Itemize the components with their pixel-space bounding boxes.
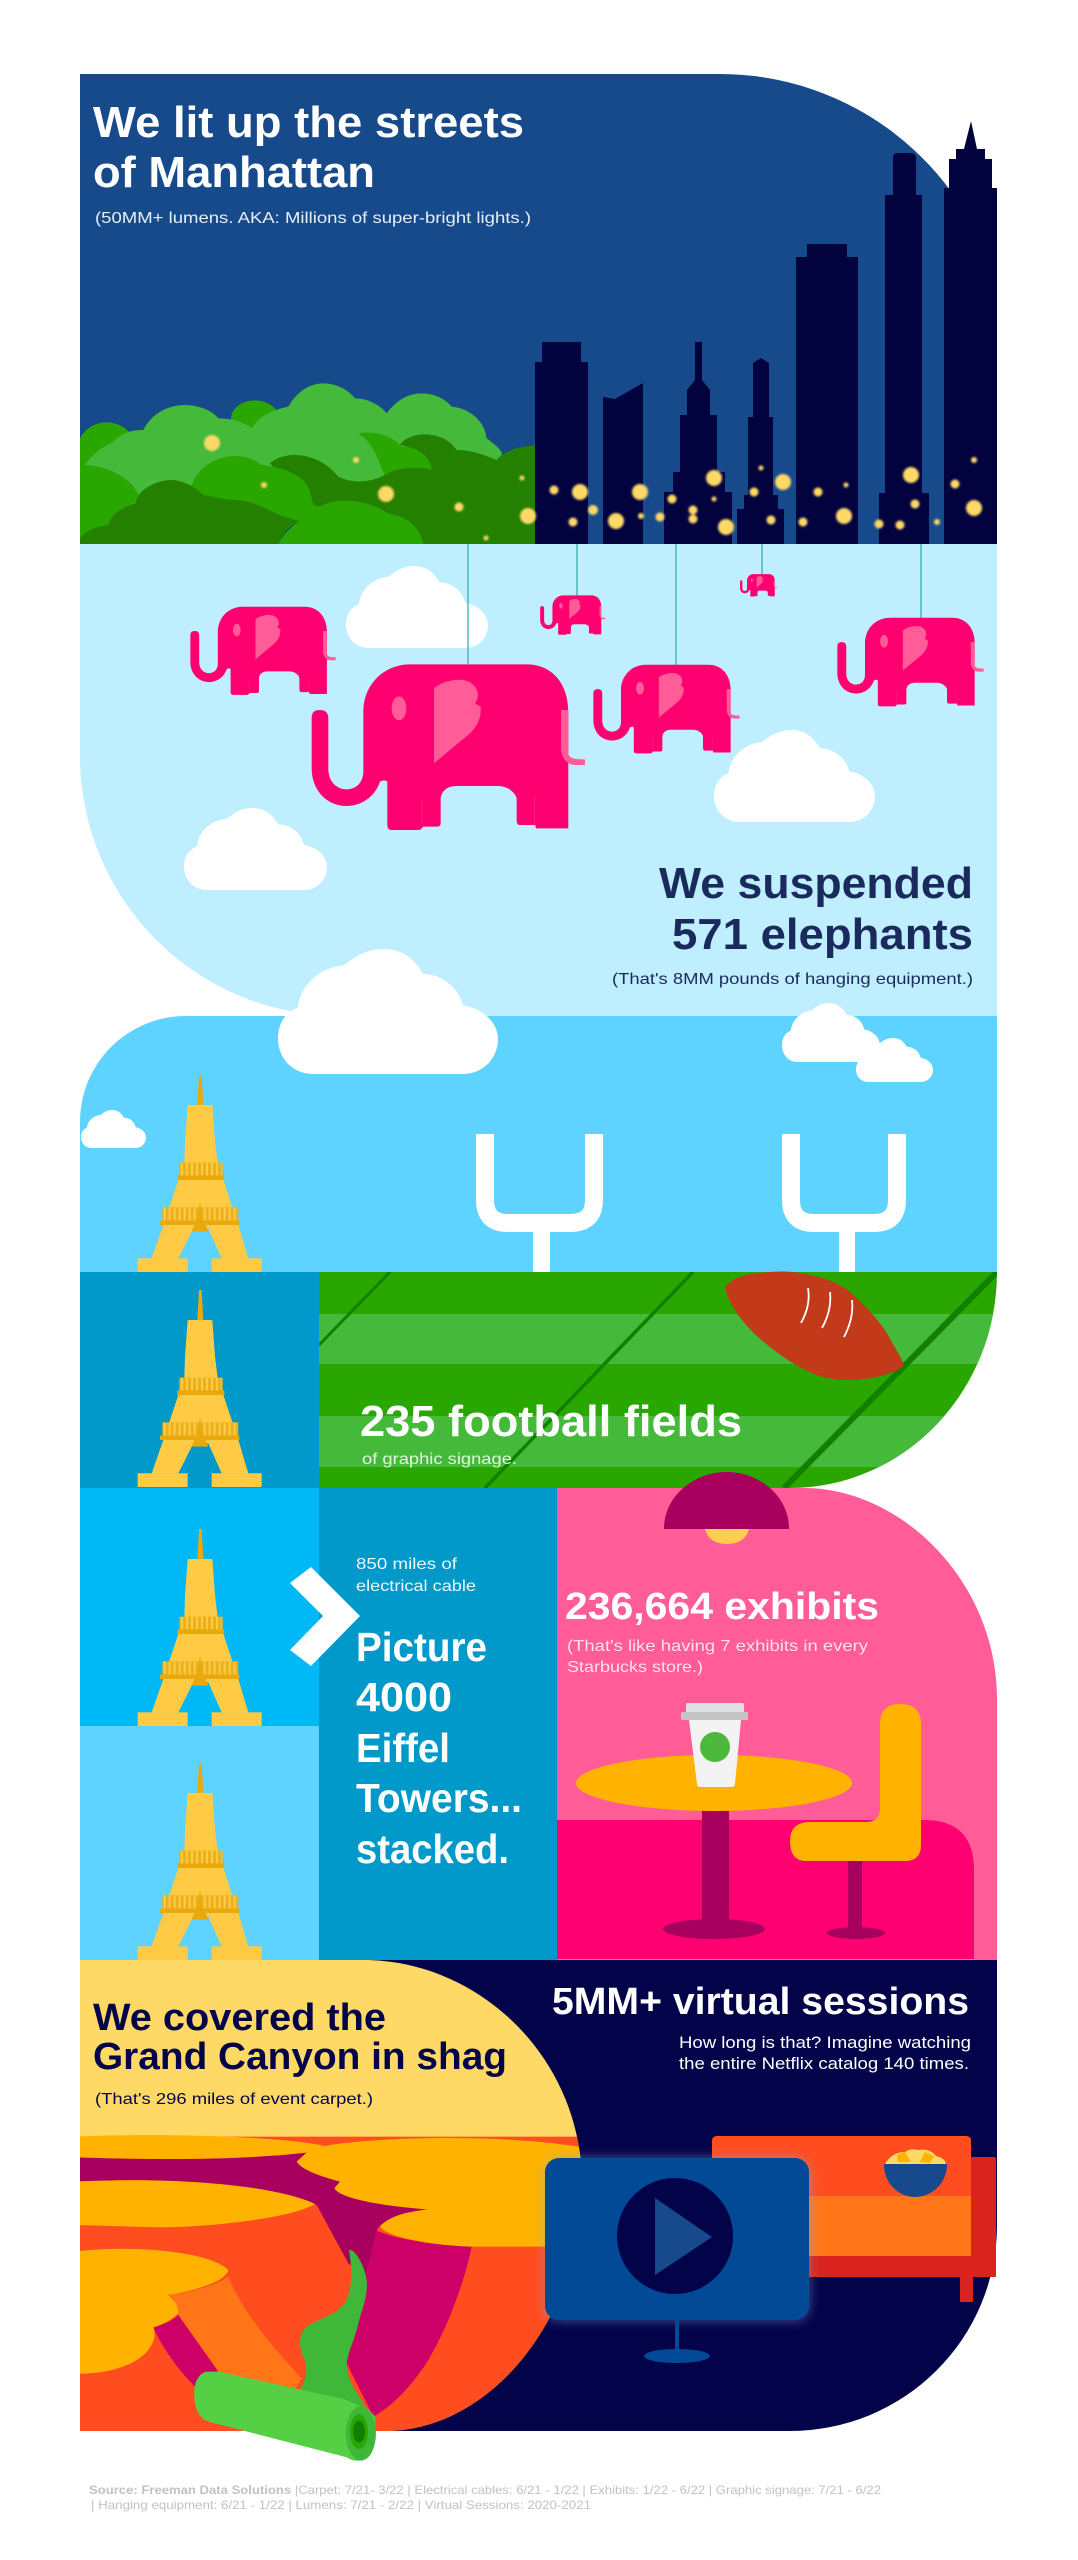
sky background bbox=[80, 1016, 997, 1272]
panel: Grand Canyon bbox=[75, 1960, 595, 2461]
cloud bbox=[714, 730, 875, 822]
panel: cable column bbox=[319, 1488, 557, 1960]
text: electrical cable: 850 miles of bbox=[356, 1556, 458, 1573]
heading: 236,664 exhibits: 236,664 exhibits bbox=[565, 1586, 879, 1628]
cloud bbox=[346, 566, 488, 648]
elephant: large centre bbox=[312, 664, 585, 830]
sofa bbox=[712, 2136, 996, 2302]
subtitle: Netflix comparison: How long is that? Imagine watching bbox=[679, 2033, 971, 2052]
lights bbox=[204, 435, 982, 540]
elephant: small bbox=[540, 595, 605, 635]
pink background bbox=[557, 1488, 997, 1960]
football bbox=[725, 1272, 904, 1380]
heading: We suspended 571 elephants: We suspended bbox=[659, 859, 973, 908]
subtitle: Starbucks comparison: Starbucks store.) bbox=[567, 1659, 703, 1676]
coffee cup bbox=[681, 1703, 748, 1787]
canyon illustration bbox=[75, 1960, 595, 2437]
cloud: small right bbox=[856, 1038, 933, 1082]
heading: Picture 4000 Eiffel Towers stacked: stacked. bbox=[356, 1826, 509, 1872]
panel: tower tile sky blue bbox=[80, 1726, 319, 1960]
heading: We covered the Grand Canyon in shag: Grand Canyon in shag bbox=[93, 2036, 507, 2078]
cloud bbox=[81, 1110, 146, 1148]
icon: Eiffel Tower 1 bbox=[138, 1075, 262, 1272]
dark background bbox=[80, 1960, 997, 2431]
goalpost: left bbox=[485, 1134, 594, 1272]
title: We lit up the streets of Manhattan: We lit up the streets bbox=[93, 98, 524, 147]
cloud bbox=[184, 808, 327, 890]
subtitle: graphic signage: of graphic signage. bbox=[362, 1451, 517, 1468]
heading: Picture 4000 Eiffel Towers stacked: 4000 bbox=[356, 1674, 452, 1720]
footer: source note: Source: Freeman Data Solutions |Carpet: 7/21- 3/22 | Electrical cables: 6/21 - 1/22 | Exhibits: 1/22 - 6/22 | Graphic signage: 7/21 - 6/22 bbox=[89, 2483, 832, 2497]
elephant: medium centre bbox=[593, 665, 740, 753]
subtitle: Starbucks comparison: (That's like having 7 exhibits in every bbox=[567, 1638, 868, 1655]
skyline bbox=[535, 121, 997, 544]
title: We lit up the streets of Manhattan: of Manhattan bbox=[93, 148, 375, 197]
panel: exhibits bbox=[557, 1472, 997, 1960]
cloud: right overlapping panels bbox=[782, 1003, 880, 1062]
heading: 235 football fields: 235 football fields bbox=[360, 1397, 742, 1446]
panel background: pale sky bbox=[80, 544, 997, 1016]
panel: tower tile bright blue bbox=[80, 1488, 319, 1726]
arrow: chevron bbox=[290, 1567, 360, 1666]
icon: Eiffel Tower 4 bbox=[138, 1763, 262, 1960]
subtitle: hanging equipment: (That's 8MM pounds of hanging equipment.) bbox=[612, 971, 973, 988]
trees bbox=[77, 383, 538, 548]
panel: Manhattan lights bbox=[77, 74, 997, 548]
video screen bbox=[545, 2158, 809, 2363]
panel background: night sky bbox=[80, 74, 997, 544]
panel: virtual sessions bbox=[80, 1960, 997, 2431]
heading: Picture 4000 Eiffel Towers stacked: Picture bbox=[356, 1624, 487, 1670]
panel: football field bbox=[319, 1272, 999, 1488]
icon: Eiffel Tower 3 bbox=[138, 1529, 262, 1726]
front shrub bbox=[278, 500, 424, 544]
floor bbox=[557, 1820, 974, 1959]
heading: Picture 4000 Eiffel Towers stacked: Towers... bbox=[356, 1775, 522, 1821]
heading: We covered the Grand Canyon in shag: We covered the bbox=[93, 1997, 386, 2039]
subtitle: Netflix comparison: the entire Netflix catalog 140 times. bbox=[679, 2054, 969, 2073]
elephant: tiny bbox=[740, 574, 777, 597]
popcorn bowl bbox=[884, 2149, 947, 2197]
text: electrical cable: electrical cable bbox=[356, 1578, 476, 1595]
carpet roll bbox=[194, 2250, 376, 2461]
lamp bbox=[664, 1472, 789, 1544]
heading: Picture 4000 Eiffel Towers stacked: Eiffel bbox=[356, 1725, 450, 1771]
panel: suspended elephants bbox=[80, 544, 997, 1016]
hanging wires bbox=[468, 544, 921, 665]
chair bbox=[790, 1704, 921, 1939]
icon: Eiffel Tower 2 bbox=[138, 1290, 262, 1487]
panel: football fields sky bbox=[80, 1016, 997, 1272]
heading: 5MM+ virtual sessions: 5MM+ virtual sessions bbox=[552, 1981, 969, 2023]
subtitle: lumens: (50MM+ lumens. AKA: Millions of super-bright lights.) bbox=[95, 210, 531, 227]
table bbox=[576, 1755, 852, 1939]
panel: tower tile dark blue bbox=[80, 1272, 319, 1488]
elephant: small left bbox=[190, 607, 336, 695]
subtitle: event carpet: (That's 296 miles of event carpet.) bbox=[95, 2091, 373, 2108]
goalpost: right bbox=[791, 1134, 897, 1272]
heading: We suspended 571 elephants: 571 elephants bbox=[672, 910, 973, 959]
turf bbox=[319, 1272, 999, 1488]
footer: source note: | Hanging equipment: 6/21 - 1/22 | Lumens: 7/21 - 2/22 | Virtual Sessions: 2020-2021 bbox=[91, 2498, 591, 2512]
elephant: right bbox=[837, 618, 984, 706]
cloud: large overlapping panels bbox=[278, 949, 498, 1074]
